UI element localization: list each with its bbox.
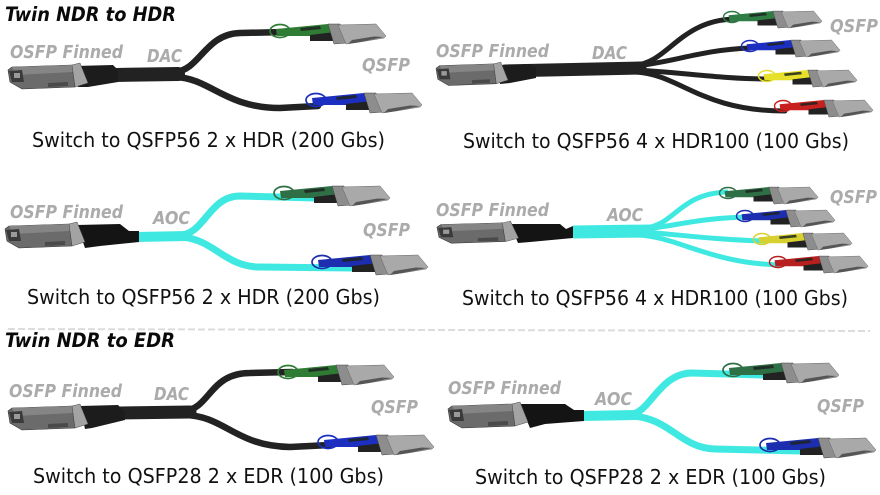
label: QSFP: QSFP [817,396,864,417]
label: QSFP: QSFP [363,220,410,241]
cable: DAC splitter [115,32,318,108]
connector: OSFP finned [8,63,118,89]
label: OSFP Finned: OSFP Finned [436,200,550,221]
caption: Switch to QSFP56 4 x HDR100 (100 Gbs) [463,129,849,153]
connector: QSFP yellow [754,233,852,250]
connector: QSFP green [720,187,818,204]
label: OSFP Finned: OSFP Finned [10,202,124,223]
connector: OSFP finned [8,404,125,430]
label: DAC: DAC [154,384,190,405]
title: Twin NDR to HDR: Twin NDR to HDR [5,3,176,26]
label: OSFP Finned: OSFP Finned [9,381,123,402]
cable: AOC splitter [582,373,802,451]
connector: QSFP yellow [758,70,857,87]
connector: QSFP blue [306,93,422,113]
label: AOC: AOC [605,205,644,226]
panel: DAC 2 x EDR [8,365,434,488]
connector: QSFP blue [760,438,876,458]
connector: QSFP green [274,186,390,206]
label: QSFP: QSFP [362,55,410,76]
label: OSFP Finned: OSFP Finned [448,378,562,399]
cable: AOC splitter [135,196,352,268]
panel: DAC 4 x HDR100 [436,11,878,153]
connector: QSFP blue [736,210,835,227]
caption: Switch to QSFP56 2 x HDR (200 Gbs) [27,285,380,309]
connector: QSFP blue [318,435,434,455]
connector: OSFP finned [436,62,536,86]
label: AOC: AOC [593,389,633,410]
label: DAC: DAC [147,46,183,67]
connector: QSFP blue [312,255,428,275]
connector: QSFP red [770,256,868,273]
connector: QSFP green [723,363,839,383]
connector: QSFP red [774,100,873,117]
caption: Switch to QSFP28 2 x EDR (100 Gbs) [33,464,384,488]
connector: QSFP green [270,24,386,44]
label: QSFP: QSFP [371,397,418,418]
connector: OSFP finned [437,221,573,243]
cable: DAC splitter [120,372,330,447]
panel: AOC 2 x EDR [448,363,876,489]
label: DAC: DAC [592,43,628,64]
connector: QSFP green [278,365,394,385]
panel: AOC 2 x HDR [5,186,428,309]
connector: OSFP finned [448,402,584,428]
caption: Switch to QSFP28 2 x EDR (100 Gbs) [475,465,826,489]
label: AOC: AOC [151,208,191,229]
cable: AOC 4-way splitter [573,192,780,265]
label: OSFP Finned: OSFP Finned [10,42,124,63]
label: OSFP Finned: OSFP Finned [436,41,550,62]
caption: Switch to QSFP56 4 x HDR100 (100 Gbs) [462,286,848,310]
connector: QSFP blue [742,40,840,57]
connector: QSFP green [724,11,822,28]
connector: OSFP finned [5,222,139,248]
panel: DAC 2 x HDR [8,24,422,152]
title: Twin NDR to EDR: Twin NDR to EDR [5,329,175,352]
caption: Switch to QSFP56 2 x HDR (200 Gbs) [32,128,385,152]
cable: DAC 4-way splitter [505,19,785,111]
panel: AOC 4 x HDR100 [436,187,877,310]
